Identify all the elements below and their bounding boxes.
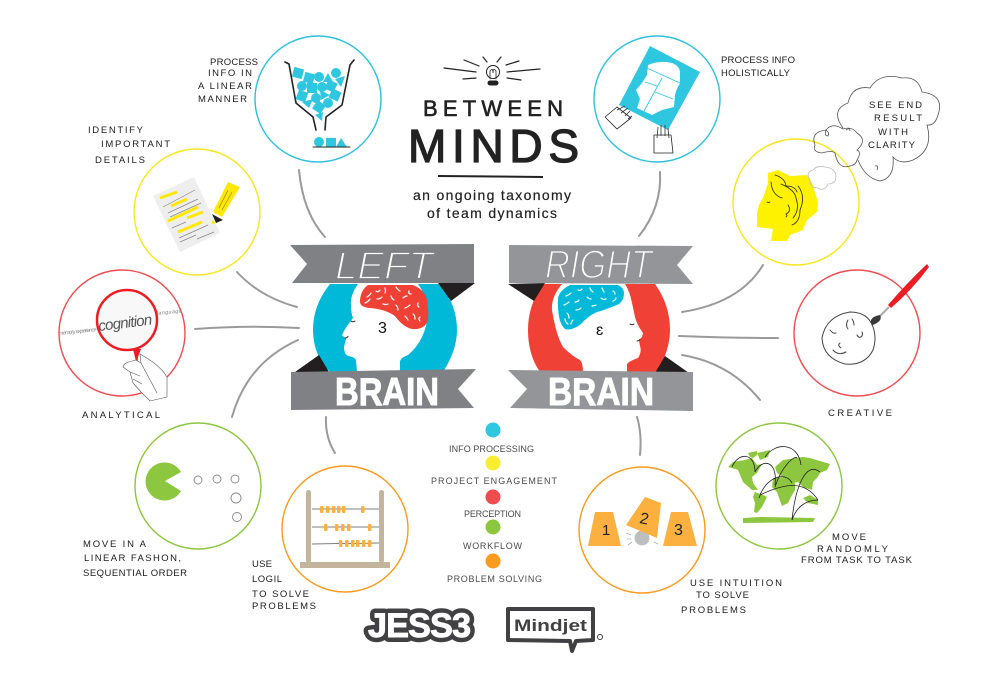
label: TO SOLVE (696, 590, 749, 601)
right brain organ (558, 285, 624, 329)
label: WITH (878, 127, 908, 138)
logo: Mindjet (508, 609, 602, 651)
legend: workflow: WORKFLOW (463, 541, 522, 551)
label: LOGIL (252, 574, 282, 585)
panel: move in a linear fashion (83, 423, 261, 579)
title (408, 96, 579, 178)
banner: right (509, 243, 693, 287)
logo: JESS3: JESS3 (368, 607, 471, 645)
icon: shell game (588, 497, 697, 546)
label: FROM TASK TO TASK (801, 555, 913, 566)
logo: JESS3: JESS3 (368, 607, 471, 645)
banner: right: RIGHT (545, 243, 654, 287)
panel: analytical (59, 270, 185, 421)
banner: left (290, 244, 474, 288)
label: RESULT (874, 113, 922, 124)
legend: perception: PERCEPTION (464, 509, 521, 519)
label: SEE END (869, 100, 922, 111)
icon: shell game: 2 (638, 510, 650, 529)
label: SEQUENTIAL ORDER (83, 568, 187, 579)
legend: project engagement (431, 456, 558, 486)
icon: hands (605, 106, 673, 153)
legend: perception (464, 490, 521, 519)
legend (431, 422, 558, 584)
label: ANALYTICAL (82, 410, 160, 421)
icon: magnifying glass: memory, experience (59, 327, 97, 337)
icon: task arcs (732, 447, 820, 520)
panel: process info holistically (594, 36, 795, 162)
left brain organ (360, 285, 428, 329)
label: PROBLEMS (681, 605, 746, 616)
label: INFO IN (208, 68, 252, 79)
right face (630, 324, 640, 341)
label: PROCESS INFO (721, 55, 795, 66)
icon: magnifying glass: cognition (97, 312, 153, 335)
panel: left brain (290, 244, 476, 414)
legend: project engagement: PROJECT ENGAGEMENT (431, 476, 558, 486)
label (868, 100, 922, 151)
left black folds (295, 283, 475, 372)
label: USE (252, 559, 272, 570)
label: HOLISTICALLY (721, 68, 791, 79)
label (681, 578, 782, 616)
panel: process info in a linear manner (198, 36, 381, 162)
label: MOVE IN A (83, 539, 147, 550)
title: BETWEEN (423, 96, 563, 121)
icon: head poster (619, 46, 700, 130)
label: CLARITY (868, 140, 916, 151)
icon: funnel with shapes (285, 60, 354, 147)
subtitle: an ongoing taxonomy (413, 187, 571, 203)
icon: paintbrush (871, 264, 929, 325)
icon: shell game: 3 (674, 522, 683, 539)
legend: info processing (449, 422, 534, 454)
label: LINEAR FASHON, (84, 553, 181, 564)
label (721, 55, 795, 79)
label: PROCESS (210, 57, 258, 68)
icon: dots (194, 475, 242, 522)
right head backdrop (528, 284, 670, 372)
legend: problem solving (447, 554, 542, 584)
label: RANDOMLY (817, 544, 889, 555)
banner: brain (508, 370, 693, 414)
legend: workflow (463, 520, 522, 551)
label (83, 539, 187, 579)
icon: hand (123, 354, 167, 401)
left head backdrop (313, 284, 457, 372)
panel: left brain: 3 (378, 320, 387, 337)
icon: world map (728, 450, 830, 523)
label (252, 559, 316, 612)
label: PROBLEMS (252, 601, 316, 612)
legend: info processing: INFO PROCESSING (449, 444, 534, 454)
icon: painted face (822, 312, 875, 364)
panel: right brain (508, 243, 693, 414)
label: TO SOLVE (252, 589, 309, 600)
label: IMPORTANT (101, 139, 170, 150)
icon: light bulb (444, 57, 540, 83)
banner: brain: BRAIN (335, 371, 439, 414)
label (88, 125, 170, 166)
label: A LINEAR (198, 81, 252, 92)
label: USE INTUITION (690, 578, 782, 589)
label (801, 532, 913, 566)
subtitle (413, 187, 571, 221)
icon: document (153, 177, 220, 252)
panel: see end result with clarity (733, 76, 940, 265)
left head silhouette (342, 284, 428, 372)
icon: pacman (146, 463, 181, 501)
panel: right brain: ɛ (596, 322, 603, 339)
icon: yellow head (757, 170, 818, 241)
panel: identify important details (88, 125, 260, 275)
title: MINDS (408, 120, 579, 172)
logo: Mindjet: Mindjet (514, 616, 587, 635)
label: CREATIVE (828, 408, 892, 419)
icon: magnifying glass (59, 290, 182, 366)
right black folds (508, 283, 689, 373)
right head silhouette (552, 284, 643, 372)
panel: creative (794, 264, 929, 419)
label (198, 57, 258, 105)
label: MANNER (198, 94, 247, 105)
label: MOVE (832, 532, 866, 543)
panel: move randomly (716, 423, 913, 566)
icon: thought clouds (808, 76, 940, 189)
icon: magnifying glass: language (157, 308, 182, 317)
panel: use logic (252, 466, 408, 612)
left face (345, 321, 355, 338)
icon: abacus (300, 490, 390, 568)
legend: problem solving: PROBLEM SOLVING (447, 574, 542, 584)
panel: use intuition (579, 467, 782, 616)
connector lines (195, 170, 778, 455)
icon: highlighter (212, 182, 240, 224)
label: IDENTIFY (88, 125, 144, 136)
label: DETAILS (95, 155, 145, 166)
banner: brain: BRAIN (548, 371, 654, 414)
subtitle: of team dynamics (427, 205, 557, 221)
icon: shell game: 1 (602, 522, 610, 539)
banner: left: LEFT (335, 245, 436, 288)
banner: brain (291, 369, 476, 414)
